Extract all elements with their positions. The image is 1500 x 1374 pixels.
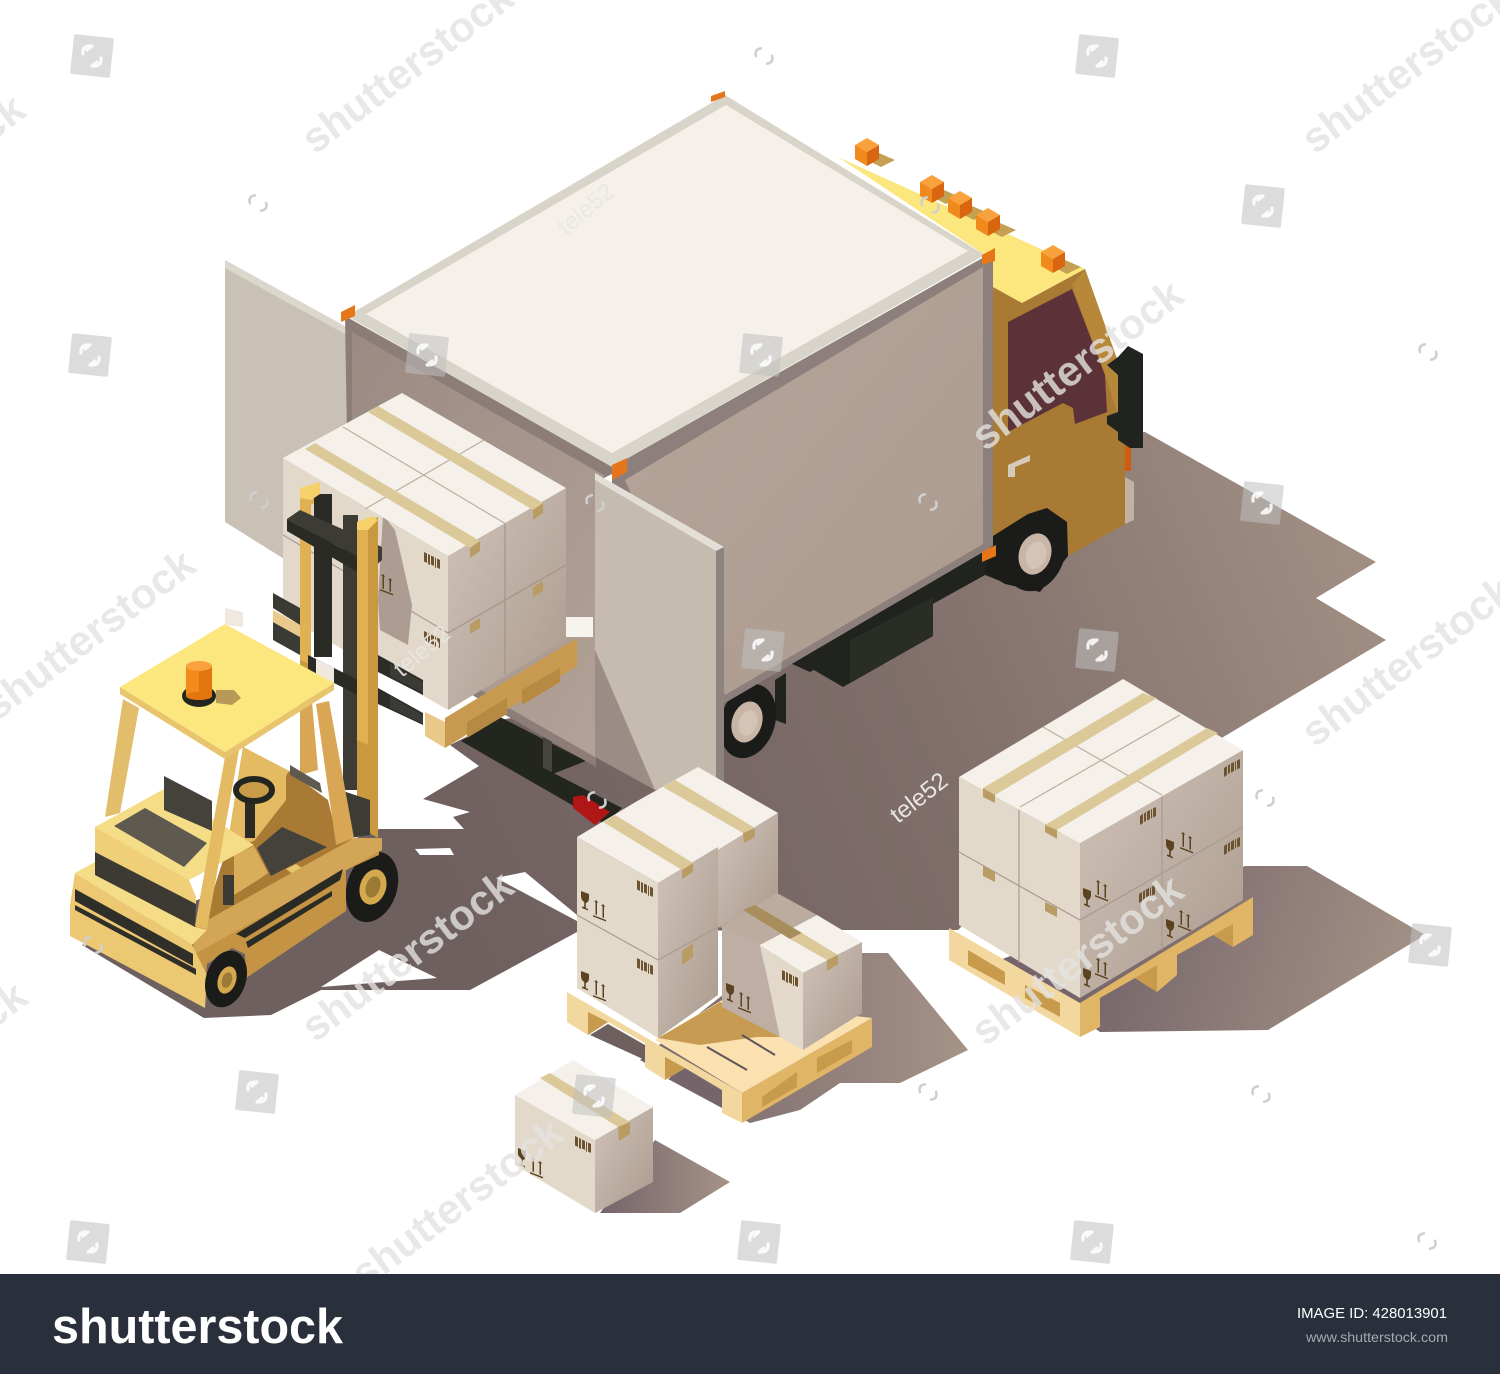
right drive wheel bbox=[337, 845, 407, 929]
cab front strip bbox=[1072, 269, 1125, 416]
truck: front wheel bbox=[994, 505, 1076, 599]
mast crossbar bbox=[287, 510, 382, 576]
front pallet bbox=[567, 992, 872, 1123]
footer bar bbox=[0, 1274, 1500, 1374]
watermark small icons bbox=[84, 47, 1437, 1250]
body base bbox=[70, 862, 207, 1008]
third box bbox=[720, 893, 862, 1050]
right pallet bbox=[949, 897, 1253, 1037]
lifted pallet bbox=[425, 638, 577, 748]
watermark text: shutterstock bbox=[292, 861, 522, 1050]
truck: underrun rails and red bumper bbox=[461, 717, 622, 825]
back pillars bbox=[105, 699, 318, 817]
cargo boxes left face bbox=[283, 458, 448, 710]
white mast block bbox=[316, 659, 334, 683]
cargo boxes top bbox=[283, 393, 566, 556]
front bumper end bbox=[1125, 477, 1134, 524]
cargo tape tabs bbox=[470, 503, 543, 634]
watermark author names: tele52 bbox=[553, 178, 620, 241]
image id: IMAGE ID: 428013901 bbox=[1297, 1305, 1447, 1322]
left mast rail bbox=[300, 487, 320, 770]
right pallet with boxes bbox=[949, 679, 1253, 1037]
truck: box side panel bbox=[612, 252, 993, 703]
ground shadow: front pallet bbox=[640, 950, 968, 1123]
watermark author names: tele52 bbox=[885, 767, 953, 829]
truck: cab bbox=[838, 138, 1143, 592]
right mast rail bbox=[300, 482, 378, 838]
site url: www.shutterstock.com bbox=[1305, 1329, 1448, 1345]
door handle bbox=[1008, 455, 1030, 477]
watermark text: shutterstock bbox=[962, 865, 1192, 1054]
mirror bbox=[1107, 346, 1143, 448]
near box stack bbox=[577, 800, 718, 1038]
body side bbox=[193, 838, 382, 1008]
cargo boxes right face bbox=[448, 488, 566, 710]
truck: chassis and fuel tank bbox=[775, 550, 1010, 724]
lifted pallet load bbox=[283, 393, 577, 748]
roof marker lights bbox=[855, 138, 1081, 274]
ground shadow: right pallet bbox=[1000, 866, 1425, 1032]
cab interior panel bbox=[200, 747, 354, 932]
lone box bbox=[515, 1060, 653, 1213]
truck bbox=[225, 91, 1143, 825]
steering wheel bbox=[236, 779, 272, 838]
truck: rear wheel bbox=[711, 677, 785, 765]
ground shadow: lone box bbox=[600, 1140, 730, 1213]
watermark text: shutterstock bbox=[342, 1108, 572, 1297]
back box stack bbox=[639, 767, 778, 928]
front wheel bbox=[198, 945, 254, 1013]
watermark author names bbox=[389, 178, 953, 829]
truck: roof bbox=[347, 95, 985, 467]
front pillars bbox=[195, 701, 354, 929]
engine hood bbox=[95, 789, 254, 927]
front pallet with boxes bbox=[567, 767, 872, 1123]
truck: corner lamps bbox=[341, 91, 996, 562]
truck: white latch bbox=[566, 617, 593, 637]
truck: left rear door bbox=[225, 260, 352, 600]
ground shadow: truck and forklift bbox=[82, 432, 1386, 1018]
front lamp bbox=[1125, 446, 1131, 471]
right pile faces bbox=[959, 750, 1243, 998]
watermark text: shutterstock bbox=[962, 270, 1192, 459]
right pile top bbox=[959, 679, 1243, 843]
cab window bbox=[1008, 289, 1107, 432]
truck: cargo interior bbox=[345, 316, 620, 767]
white guard block bbox=[225, 608, 243, 627]
forks bbox=[273, 593, 423, 725]
dark mast uprights bbox=[308, 494, 358, 790]
footer logo: shutterstock bbox=[52, 1300, 344, 1354]
forklift bbox=[70, 482, 423, 1013]
right pile tabs and marks bbox=[983, 759, 1240, 988]
seat back bbox=[164, 776, 212, 831]
beacon light bbox=[182, 661, 241, 707]
watermark author names: tele52 bbox=[389, 620, 456, 683]
wheel arch bbox=[985, 508, 1068, 592]
cab roof bbox=[838, 157, 1085, 303]
overhead guard bbox=[120, 624, 334, 759]
truck: right rear door bbox=[595, 473, 724, 790]
cab side bbox=[993, 269, 1125, 556]
